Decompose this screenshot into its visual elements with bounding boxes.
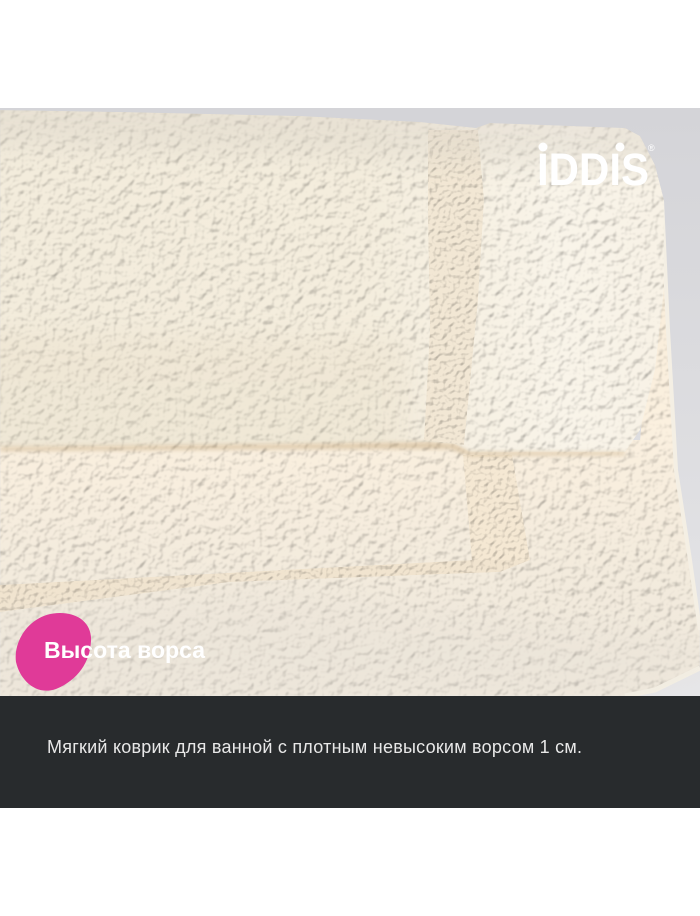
dark caption band (0, 696, 700, 808)
photo backdrop (0, 108, 700, 696)
lower mat stitched corner (625, 668, 700, 696)
logo: iDDiS (537, 142, 655, 195)
logo dot right (616, 142, 624, 152)
caption text: Мягкий коврик для ванной с плотным невысоким ворсом 1 см. (47, 737, 582, 757)
heading: Высота ворса: Высота ворса (44, 637, 205, 663)
logo wordmark: IDDIS (537, 144, 649, 195)
lower mat stitched edge (662, 200, 700, 630)
rolled mat tone overlays (0, 90, 700, 470)
lower mat woven band vertical (463, 455, 530, 562)
roll shadow (0, 442, 625, 456)
infographic canvas (0, 108, 700, 808)
rolled mat (0, 110, 664, 452)
rolled mat left shading (314, 438, 315, 439)
photo: rolled bath mat (0, 90, 700, 696)
rolled mat grey top tint (0, 110, 654, 166)
logo registered mark: ® (648, 143, 655, 153)
lower pile tone (0, 585, 700, 696)
logo dot left (538, 142, 548, 152)
lower mat woven band horizontal (0, 560, 530, 612)
rolled mat woven band (424, 130, 484, 445)
pink blob behind heading (16, 613, 91, 691)
lower mat layer (0, 200, 700, 696)
